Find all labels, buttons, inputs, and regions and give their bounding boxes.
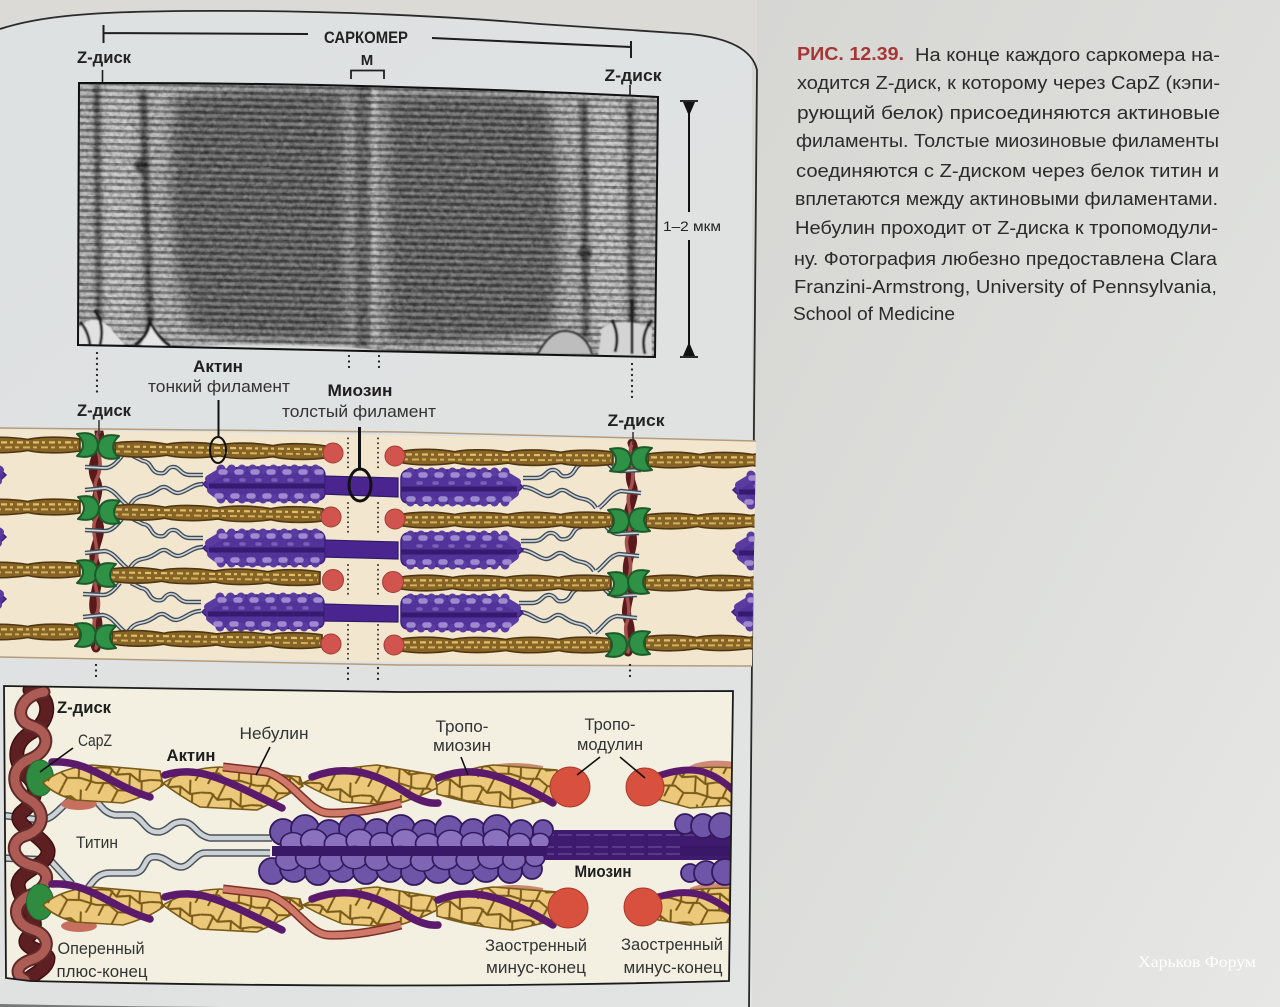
titin springs <box>83 456 641 633</box>
CapZ green caps <box>75 433 652 657</box>
labels in detail panel: right: минус-конец <box>486 958 586 977</box>
Z-disk label right <box>604 66 662 97</box>
callout: myosin filament loop <box>349 427 371 501</box>
labels in detail panel: right <box>433 715 723 977</box>
figure caption: На конце каждого саркомера на- <box>915 44 1220 65</box>
actin filaments right half <box>400 448 756 654</box>
labels in detail panel: right: модулин <box>577 735 643 754</box>
label: Актин, thin filament: тонкий филамент <box>148 377 290 396</box>
labels in detail panel: left: Z-диск <box>57 698 111 717</box>
labels in detail panel: right: Заостренный <box>485 936 587 955</box>
sarcomere bracket with heading <box>103 25 631 58</box>
bottom organelles <box>78 300 652 358</box>
labels in detail panel: left: плюс-конец <box>56 962 148 981</box>
Z-disk ticks <box>99 420 633 445</box>
myosin heads right <box>675 813 738 885</box>
actin filaments left half <box>0 437 325 649</box>
Z-disk label left: Z-диск <box>77 48 131 67</box>
figure caption: соединяются с Z-диском через белок титин и <box>796 160 1219 181</box>
CapZ caps <box>26 760 54 920</box>
figure caption: ну. Фотография любезно предоставлена Clara <box>794 248 1218 269</box>
callout: actin filament loop <box>210 400 226 463</box>
Z-disk label left <box>77 48 131 83</box>
labels in detail panel: left: Оперенный <box>58 939 144 958</box>
scale arrow: 1–2 мкм: 1–2 мкм <box>663 218 721 234</box>
labels in detail panel: left <box>56 698 308 981</box>
figure caption: Небулин проходит от Z-диска к тропомодули- <box>795 217 1218 238</box>
figure caption: филаменты. Толстые миозиновые филаменты <box>796 130 1219 151</box>
panel: sarcomere filament schematic <box>0 420 756 667</box>
tropomodulin caps <box>321 443 405 655</box>
panel: detailed sarcomere view <box>0 686 738 986</box>
labels in detail panel: left: Небулин <box>240 724 308 743</box>
figure caption: School of Medicine <box>793 303 955 324</box>
sarcomere bracket with heading: САРКОМЕР <box>324 28 408 47</box>
Z-disk label right: Z-диск <box>604 66 662 85</box>
lower dotted guide lines <box>96 665 630 684</box>
figure caption: ходится Z-диск, к которому через CapZ (кэпи- <box>797 72 1220 93</box>
label: Актин, thin filament <box>148 357 290 396</box>
myosin thick filament shafts <box>540 830 735 860</box>
titin <box>0 795 272 888</box>
Z-disk labels over band: Z-диск <box>608 411 665 430</box>
figure caption: рующий белок) присоединяются актиновые <box>797 102 1220 123</box>
labels in detail panel: left: Титин <box>76 833 118 852</box>
scale arrow: 1–2 мкм <box>663 101 721 357</box>
right Z-disk strand <box>626 443 634 652</box>
label: Актин, thin filament: Актин <box>193 357 243 376</box>
thick shafts <box>322 476 398 622</box>
watermark: Харьков Форум <box>1138 954 1256 971</box>
Z-disk labels over band <box>77 401 665 430</box>
labels in detail panel: left: Актин <box>166 746 216 765</box>
Z-disk coil <box>14 690 48 982</box>
leader lines in detail panel <box>40 747 645 778</box>
labels in detail panel: right: Заостренный <box>621 935 723 954</box>
Z-disk labels over band: Z-диск <box>77 401 131 420</box>
dotted guides in band <box>348 424 378 660</box>
labels in detail panel: right: Тропо- <box>584 715 636 734</box>
labels in detail panel: right: минус-конец <box>624 958 723 977</box>
labels in detail panel: right: Тропо- <box>436 717 488 736</box>
labels in detail panel: left: CapZ <box>78 731 112 750</box>
figure caption: РИС. 12.39. <box>797 43 904 64</box>
tropomodulin caps <box>548 767 664 928</box>
figure caption: вплетаются между актиновыми филаментами. <box>795 188 1218 209</box>
myosin heads <box>0 458 855 630</box>
M band label: М <box>361 52 373 69</box>
labels in detail panel: right: миозин <box>433 736 491 755</box>
label: Миозин, thick filament <box>282 381 436 421</box>
right actin stubs <box>652 761 735 925</box>
upper actin filament with tropomyosin and nebulin <box>43 762 557 813</box>
left Z-disk strand <box>93 432 100 648</box>
upper dotted guide lines <box>97 353 632 401</box>
figure caption: Franzini-Armstrong, University of Pennsylvania, <box>794 276 1217 297</box>
myosin heads left <box>259 815 553 885</box>
M band label <box>351 52 384 79</box>
labels in detail panel: right: Миозин <box>574 862 632 881</box>
figure caption <box>793 43 1220 324</box>
lower actin filament with tropomyosin and nebulin <box>43 884 557 935</box>
dark A bands <box>97 84 632 350</box>
label: Миозин, thick filament: толстый филамент <box>282 402 436 421</box>
label: Миозин, thick filament: Миозин <box>328 381 392 400</box>
electron micrograph of sarcomere <box>70 75 670 365</box>
